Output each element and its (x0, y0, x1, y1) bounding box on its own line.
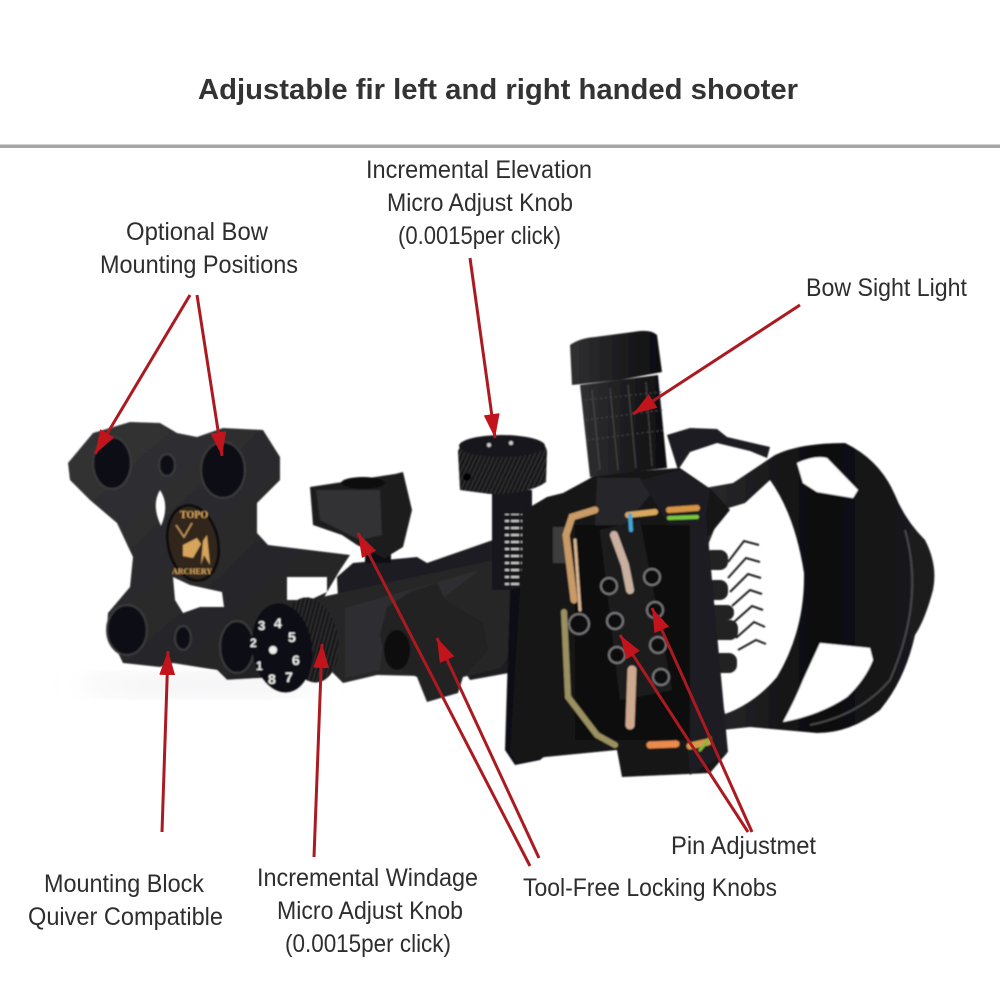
arrow: windage knob (314, 644, 322, 857)
label: windage knob: Micro Adjust Knob (277, 897, 463, 925)
label: elevation knob (366, 156, 592, 250)
windage knob: 6 (292, 652, 300, 668)
arrow: optional mounting left (95, 295, 190, 454)
windage knob: 8 (268, 671, 276, 687)
label: mounting positions: Optional Bow (126, 218, 269, 246)
arrow: right pin screw (652, 608, 752, 832)
bow sight product photo (68, 331, 934, 777)
locking knob upper (310, 472, 412, 563)
label: mounting block (28, 870, 223, 931)
arrow: upper locking knob (358, 533, 530, 866)
elevation rack (492, 490, 552, 765)
arrows (95, 258, 800, 866)
arrow: mounting block (162, 651, 168, 832)
label: pin adjustment: Pin Adjustmet (671, 832, 816, 860)
mounting block (68, 422, 350, 680)
label: mounting positions (100, 218, 298, 279)
pin springs (704, 541, 766, 673)
label: bow sight light: Bow Sight Light (806, 274, 967, 302)
elevation knob (458, 435, 547, 494)
arrow: elevation knob (470, 258, 495, 438)
logo medallion: TOPO (180, 510, 208, 521)
windage knob (246, 593, 345, 697)
arrow: optional mounting right (197, 295, 222, 456)
label: windage knob (257, 864, 478, 958)
label: mounting positions: Mounting Positions (100, 251, 298, 279)
windage knob: 4 (274, 615, 282, 631)
arrow: sight light (633, 305, 800, 414)
colored fiber optic wires (564, 508, 710, 750)
label: windage knob: Incremental Windage (257, 864, 478, 892)
locking knob lower (380, 583, 488, 702)
sight light cylinder (570, 331, 667, 477)
logo medallion: ARCHERY (172, 567, 212, 576)
label: locking knobs: Tool-Free Locking Knobs (523, 874, 777, 902)
windage knob: 5 (288, 629, 296, 645)
back sight ring (667, 428, 770, 470)
label: elevation knob: Micro Adjust Knob (387, 189, 573, 217)
title: Adjustable fir left and right handed shooter (198, 74, 798, 106)
sight body (510, 468, 730, 777)
windage knob: 1 (256, 659, 263, 673)
logo medallion (161, 501, 225, 585)
windage arm (317, 530, 525, 683)
pin adjustment screws (569, 569, 669, 685)
arrow: lower locking knob (437, 638, 539, 858)
label: mounting block: Quiver Compatible (28, 903, 223, 931)
windage knob: 2 (250, 636, 257, 650)
label: elevation knob: Incremental Elevation (366, 156, 592, 184)
label: mounting block: Mounting Block (44, 870, 204, 898)
mounting holes (93, 437, 254, 673)
sight pin guard ring (705, 443, 934, 733)
arrow: left pin screw (620, 635, 748, 832)
windage knob: 3 (258, 618, 265, 633)
label: elevation knob: (0.0015per click) (398, 222, 561, 250)
label: windage knob: (0.0015per click) (285, 930, 451, 958)
windage knob: 7 (285, 669, 293, 685)
